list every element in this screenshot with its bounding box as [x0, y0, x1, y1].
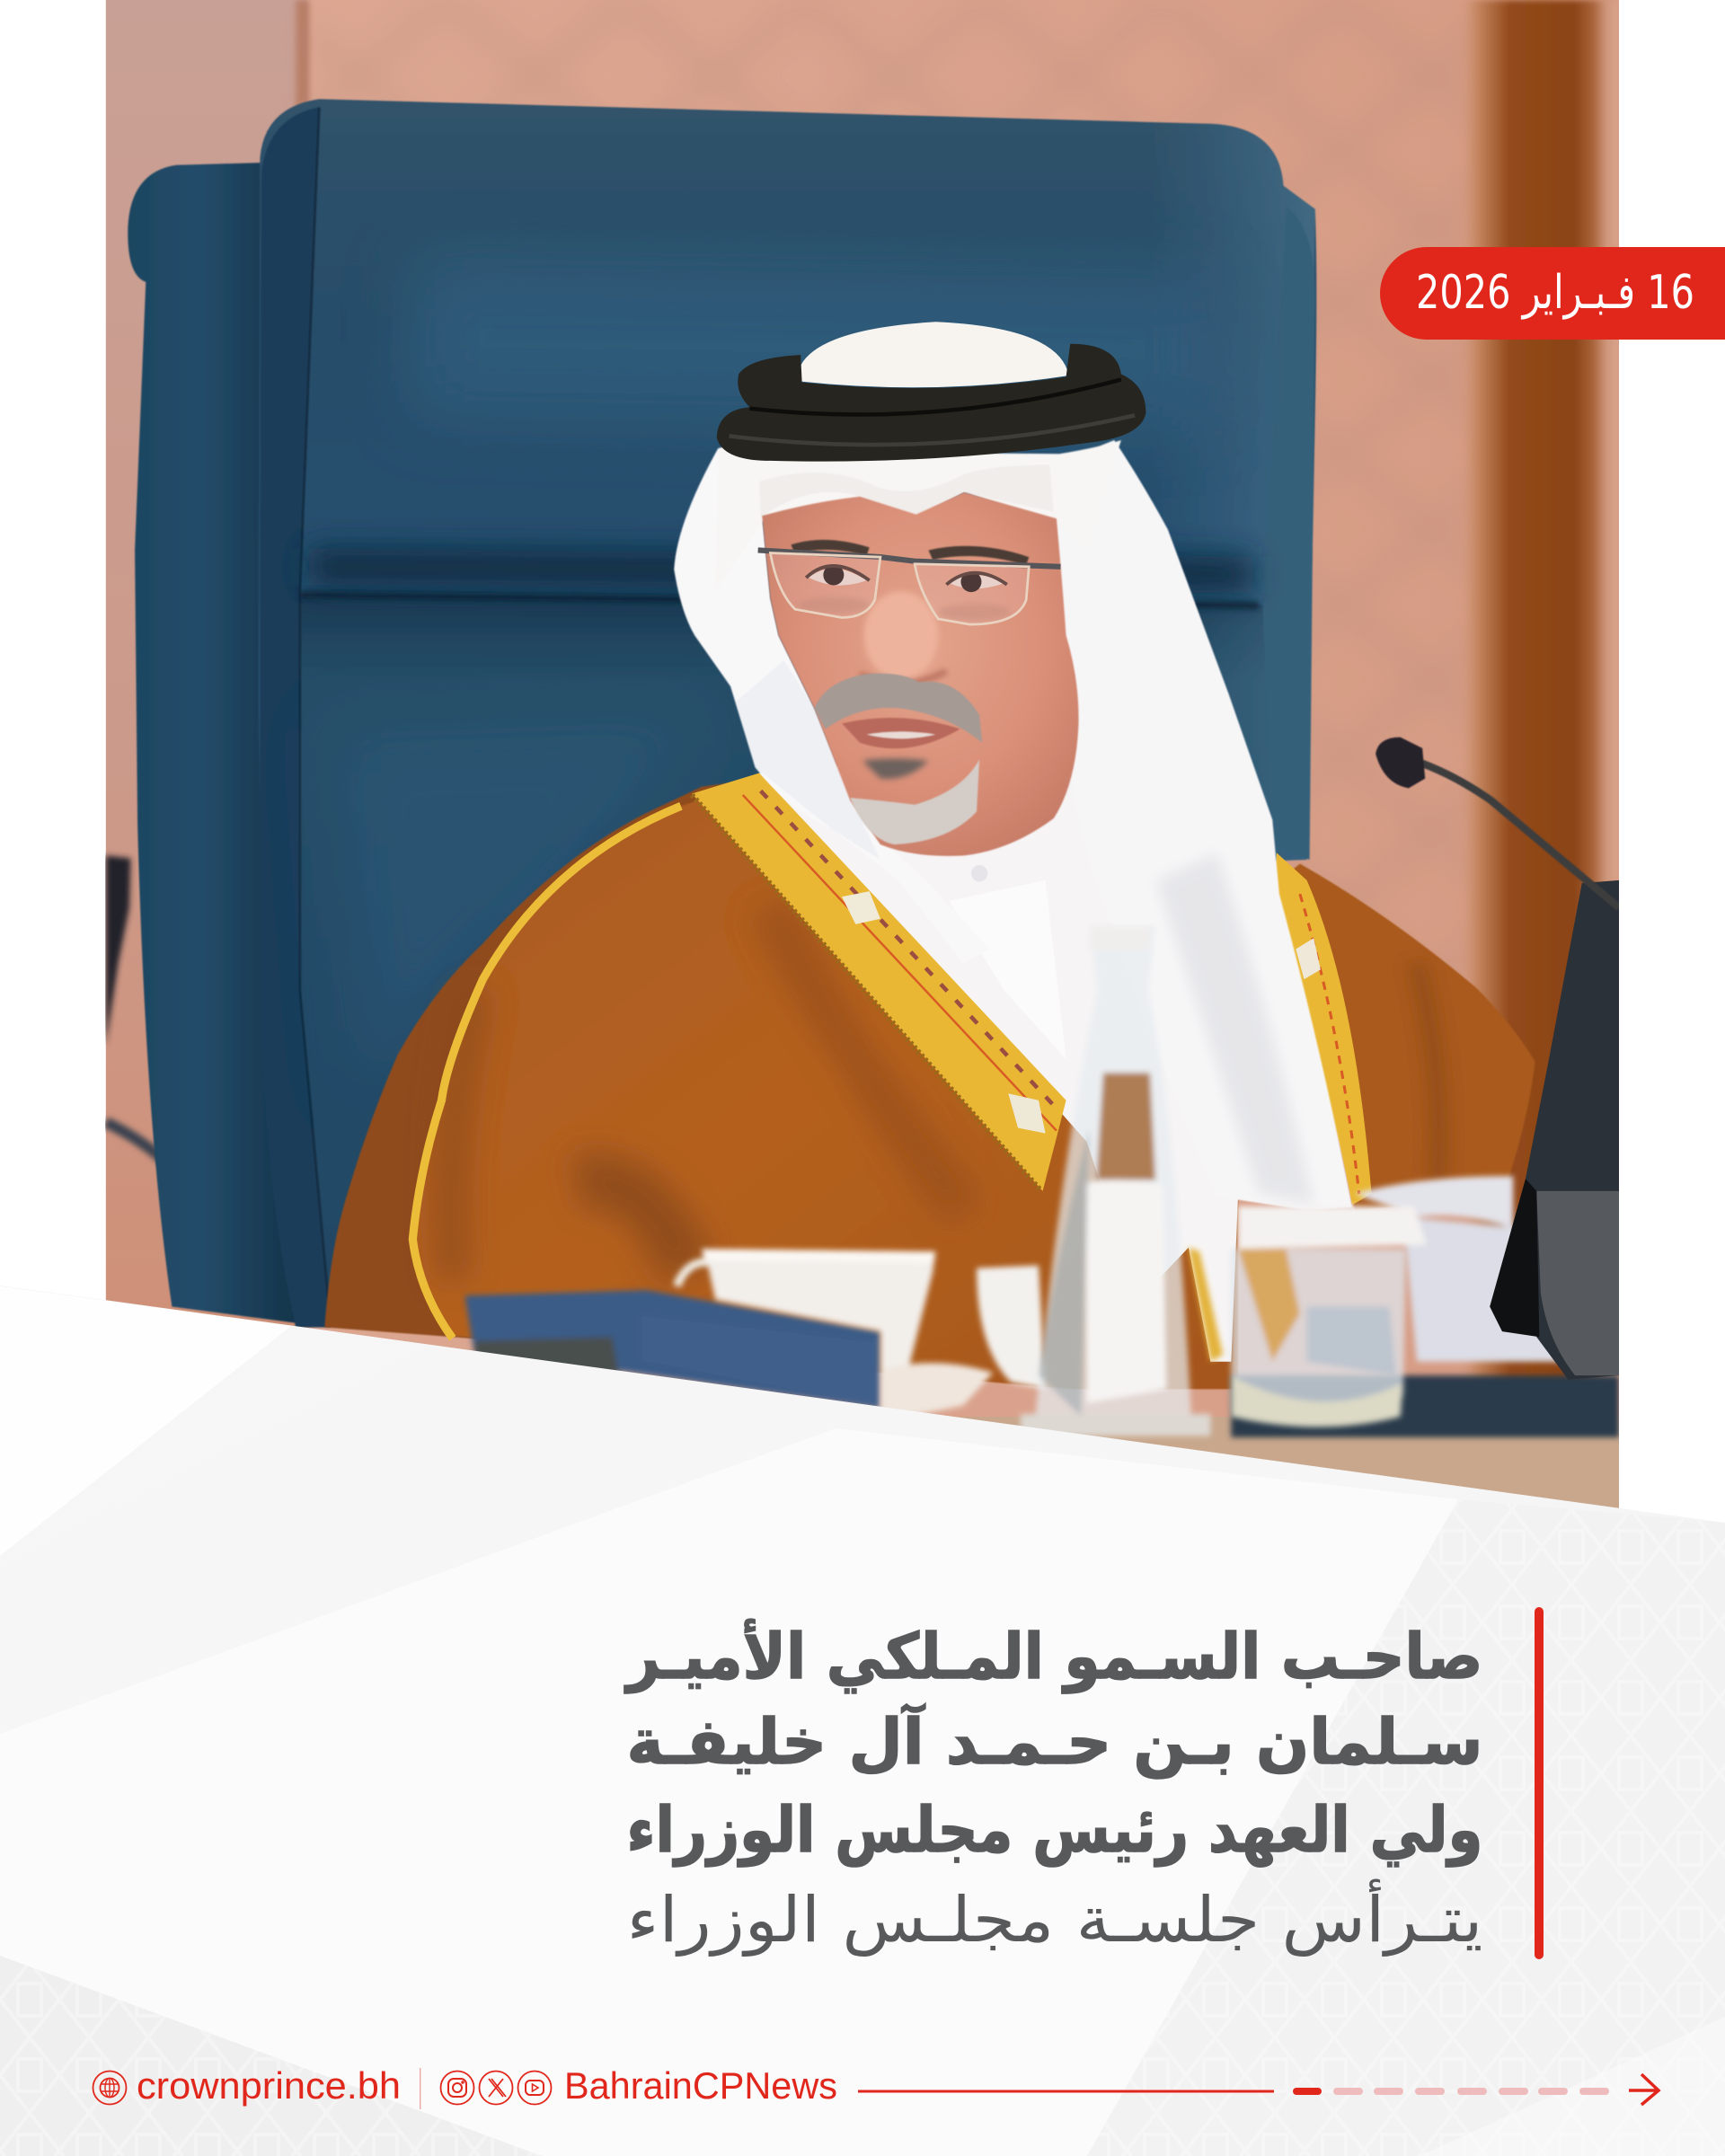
- red vertical accent bar: [1535, 1607, 1544, 1959]
- long rule: [858, 2090, 1274, 2093]
- gold trim lower piece behind bottle: [1189, 1248, 1223, 1362]
- background wall: [106, 0, 1619, 1513]
- photo: official seated at council table: [106, 0, 1619, 1513]
- robe piping: gold edge: [412, 806, 681, 1339]
- gold embroidered trim right: [1272, 853, 1372, 1205]
- tablet device: [1490, 880, 1619, 1380]
- website address: crownprince.bh: [137, 2064, 401, 2107]
- documents behind glass: [1355, 1176, 1575, 1362]
- ghutra: white head scarf: [674, 440, 1352, 1210]
- drinking glass with lid: [1231, 1206, 1427, 1427]
- page dots: [1293, 2088, 1609, 2095]
- water bottle: [1021, 925, 1210, 1436]
- icon: globe: [93, 2072, 126, 2104]
- social handle: BahrainCPNews: [564, 2064, 837, 2107]
- headline line 4: يتـرأس جلسـة مجلـس الوزراء: [627, 1878, 1482, 1957]
- desk microphone: [1376, 738, 1619, 908]
- eyes: [798, 565, 1010, 621]
- date badge: [1380, 247, 1725, 340]
- executive leather chair: [128, 99, 1316, 1328]
- headline line 3: ولي العهد رئيس مجلس الوزراء: [627, 1793, 1482, 1867]
- gold embroidered trim left: [692, 773, 1066, 1191]
- eyebrows: [791, 540, 1029, 565]
- nose: [860, 591, 946, 684]
- face: [758, 492, 1079, 856]
- eyeglasses: [758, 550, 1060, 624]
- bottom panel with faceted background: [0, 1286, 1725, 2156]
- icon: instagram: [440, 2072, 474, 2104]
- agal: black double cord: [717, 322, 1146, 462]
- coffee cup and saucer: [677, 1249, 993, 1417]
- arrow: [1629, 2074, 1659, 2105]
- moustache and beard: [814, 674, 982, 844]
- date badge: 16 فـبـراير 2026: [1416, 266, 1694, 320]
- headline line 2: سـلمان بـن حـمـد آل خليفـة: [627, 1703, 1482, 1779]
- white thobe: [759, 743, 1238, 1362]
- table top: [880, 1375, 1619, 1513]
- headline text: [624, 1619, 1482, 1957]
- second cup: [977, 1266, 1046, 1389]
- left microphone stand in background: [106, 855, 251, 1313]
- blue folder: [465, 1290, 880, 1409]
- icon: youtube: [518, 2072, 552, 2104]
- footer bar: [93, 2064, 1659, 2109]
- robe: brown bisht: [324, 777, 1535, 1389]
- icon: X: [480, 2072, 512, 2104]
- headline line 1: صاحـب السـمو المـلكي الأميـر: [624, 1619, 1482, 1693]
